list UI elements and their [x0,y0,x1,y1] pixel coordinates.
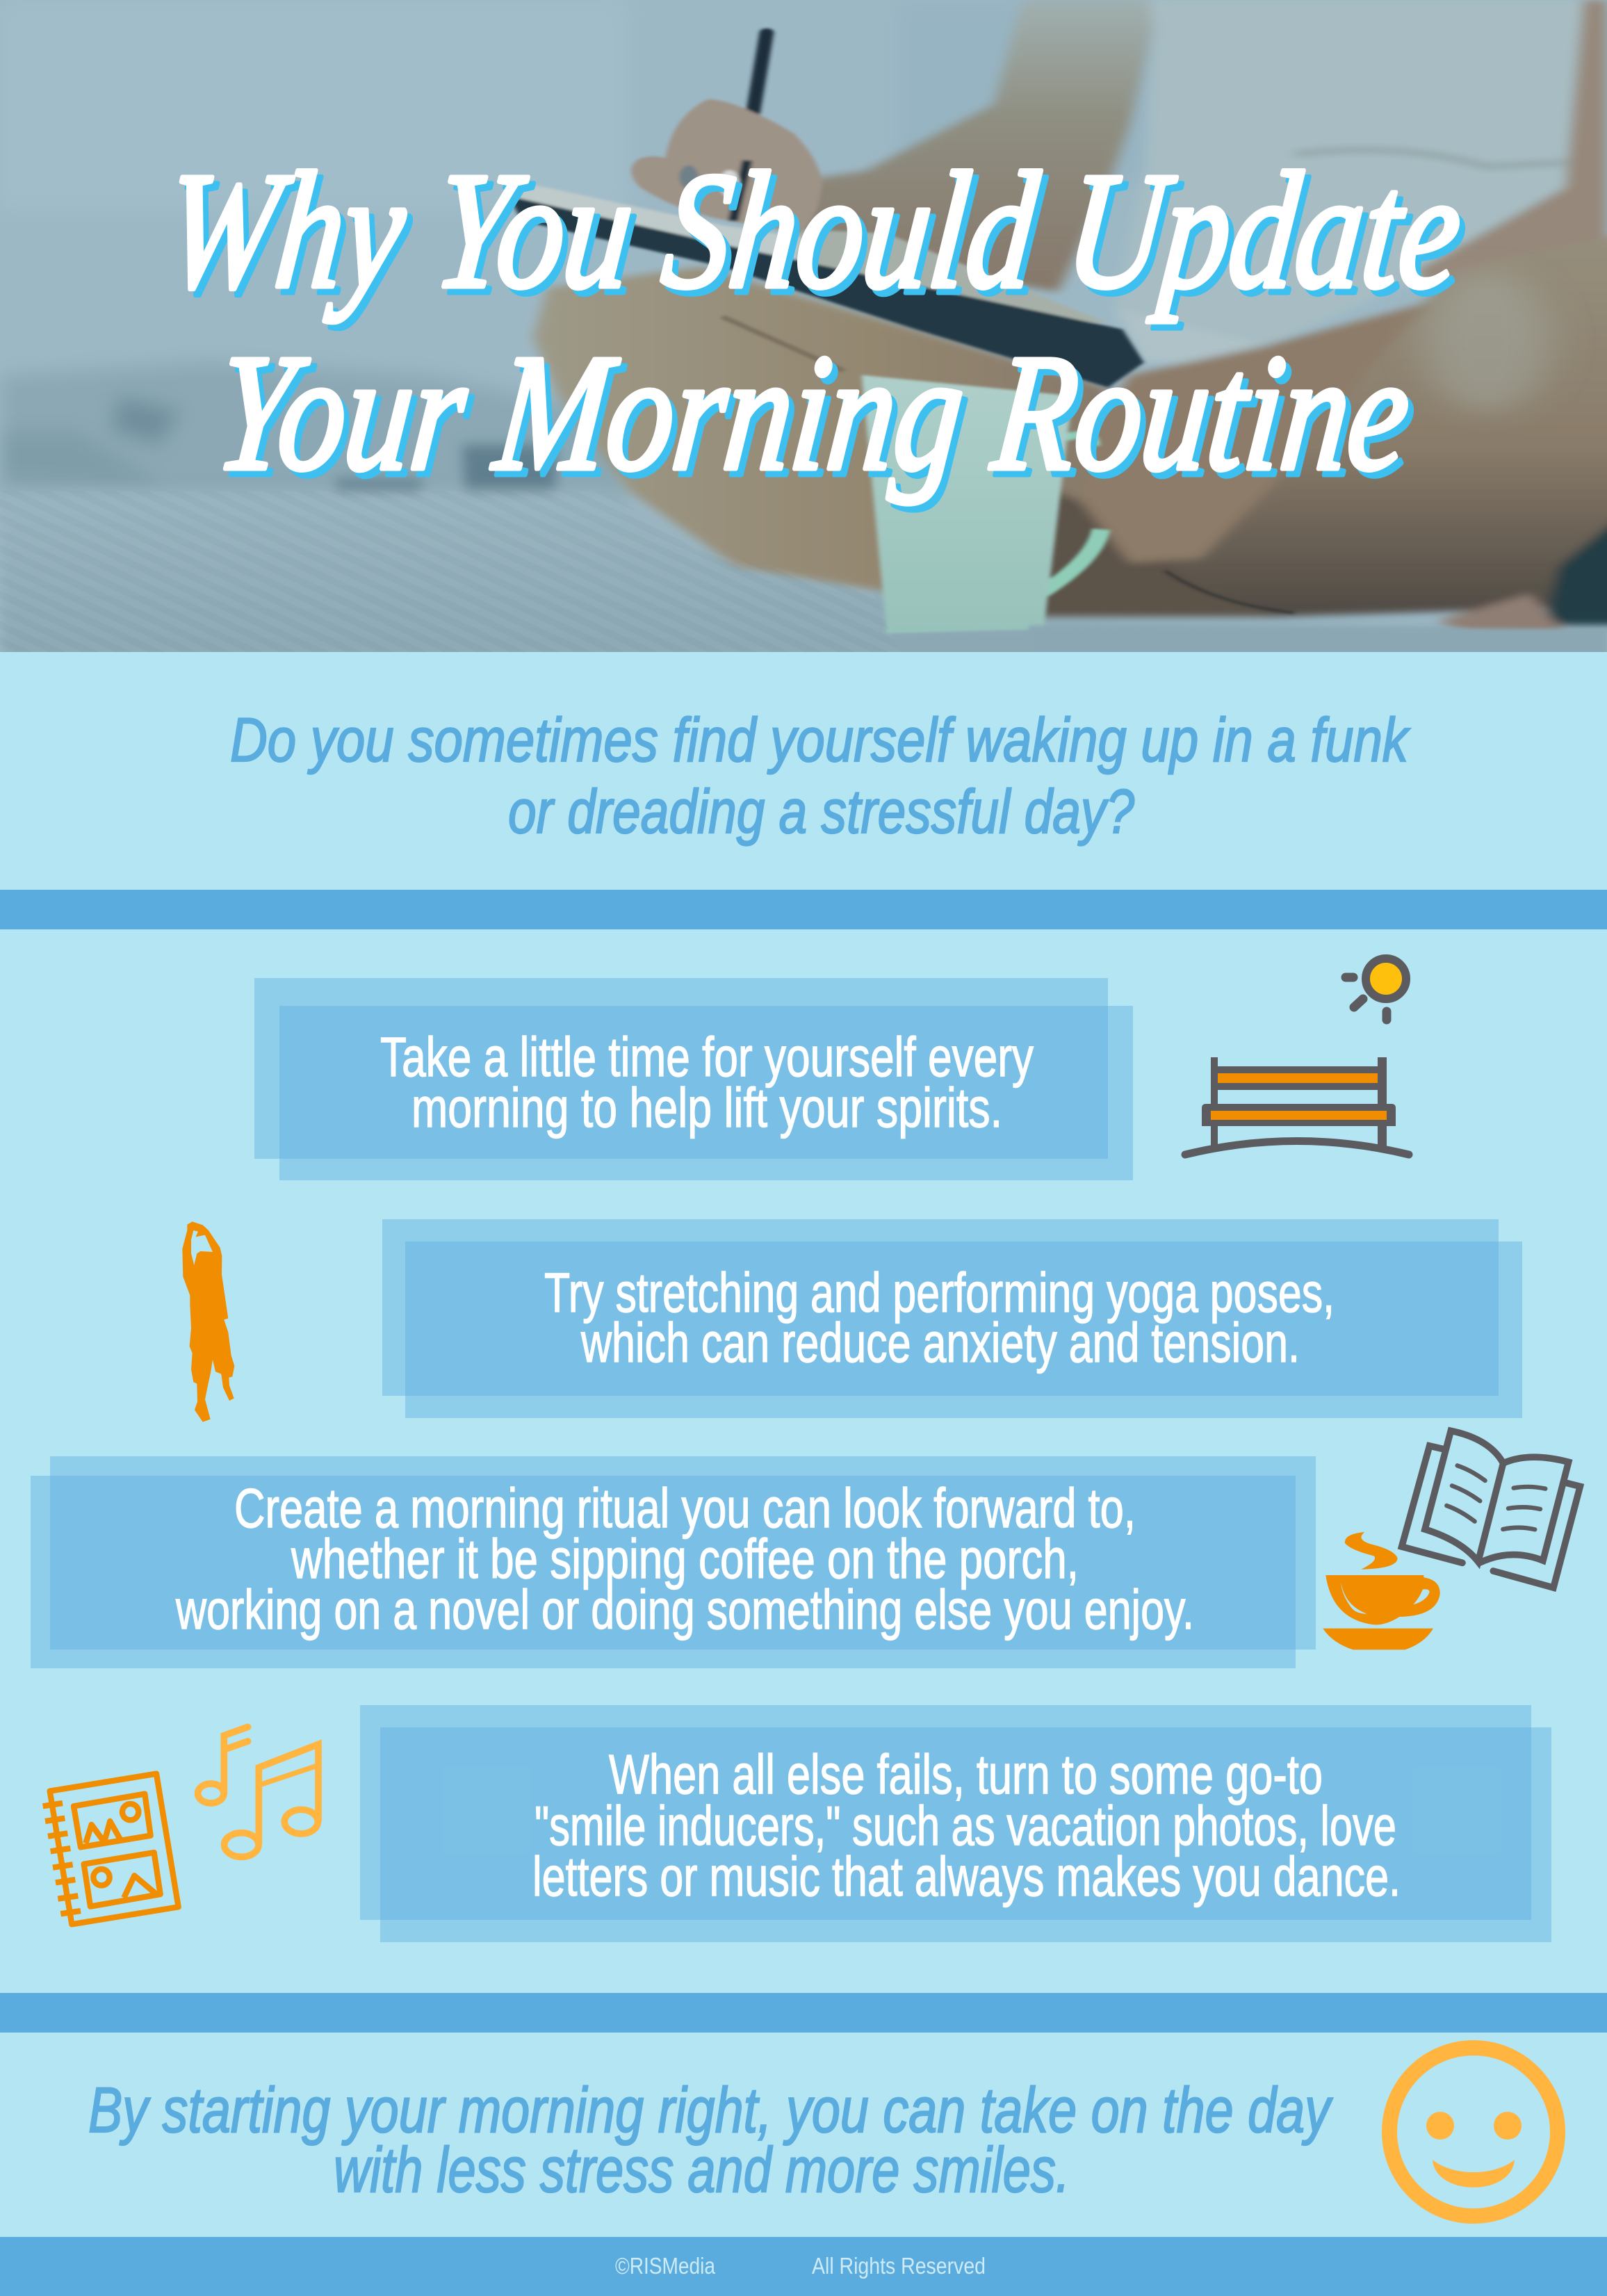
panel 2: stretching and yoga: Try stretching and performing yoga poses, [544,1262,1335,1324]
panel 1: take time for yourself: morning to help lift your spirits. [411,1077,1002,1139]
intro question: Do you sometimes find yourself waking up in a funk [230,705,1411,774]
footer bar [0,2237,1607,2296]
book cover [508,196,1144,388]
icon: smiley face [1389,2048,1558,2216]
mug handle [1029,529,1101,600]
icon: coffee cup [1323,1532,1440,1650]
title [157,139,1469,505]
hero photo: woman writing in a journal on a bed with a mug [0,0,1607,660]
knee crease [1166,571,1294,612]
footer bar: All Rights Reserved [812,2253,986,2279]
icon: music notes [198,1727,318,1857]
intro question: or dreading a stressful day? [508,776,1134,846]
right side forearm [1415,0,1607,300]
pages [794,229,1108,323]
closing statement [88,2075,1333,2206]
panel 3: create a morning ritual: Create a morning ritual you can look forward to, [234,1477,1136,1539]
panel 4: smile inducers: When all else fails, turn to some go-to [609,1743,1323,1805]
hand on mug [1079,300,1437,562]
mug [862,375,1072,633]
panel 2: stretching and yoga: which can reduce anxiety and tension. [580,1312,1300,1374]
panel 1: take time for yourself: Take a little time for yourself every [380,1026,1034,1088]
panel 1: take time for yourself [254,978,1133,1180]
panel 2: stretching and yoga [382,1219,1522,1418]
lower leg [1029,479,1273,617]
foot [1437,594,1565,640]
icon: sun [1346,959,1406,1020]
icon: stretching figure [182,1221,234,1422]
panel 4: smile inducers [360,1705,1551,1942]
icon: photo album [43,1774,179,1924]
thigh crease [722,317,844,371]
top divider band [0,890,1607,929]
panel 3: create a morning ritual: working on a novel or doing something else you enjoy. [175,1579,1194,1640]
closing statement: with less stress and more smiles. [334,2135,1070,2206]
footer bar: ©RISMedia [615,2253,716,2279]
icon: park bench [1185,1057,1409,1155]
intro question [230,705,1411,846]
right knee [1173,234,1607,617]
dark gap [1544,508,1607,625]
shorts [1116,309,1266,363]
panel 3: create a morning ritual: whether it be sipping coffee on the porch, [291,1528,1079,1590]
forearm upper [794,0,1152,292]
shirt [1116,0,1583,346]
icon: open book [1402,1431,1580,1588]
writing hand [631,99,822,234]
front blanket [1029,626,1607,660]
thigh [533,267,1129,617]
panel 3: create a morning ritual [31,1456,1316,1668]
pen [752,33,767,117]
closing statement: By starting your morning right, you can take on the day [88,2075,1333,2146]
bottom divider band [0,1993,1607,2033]
